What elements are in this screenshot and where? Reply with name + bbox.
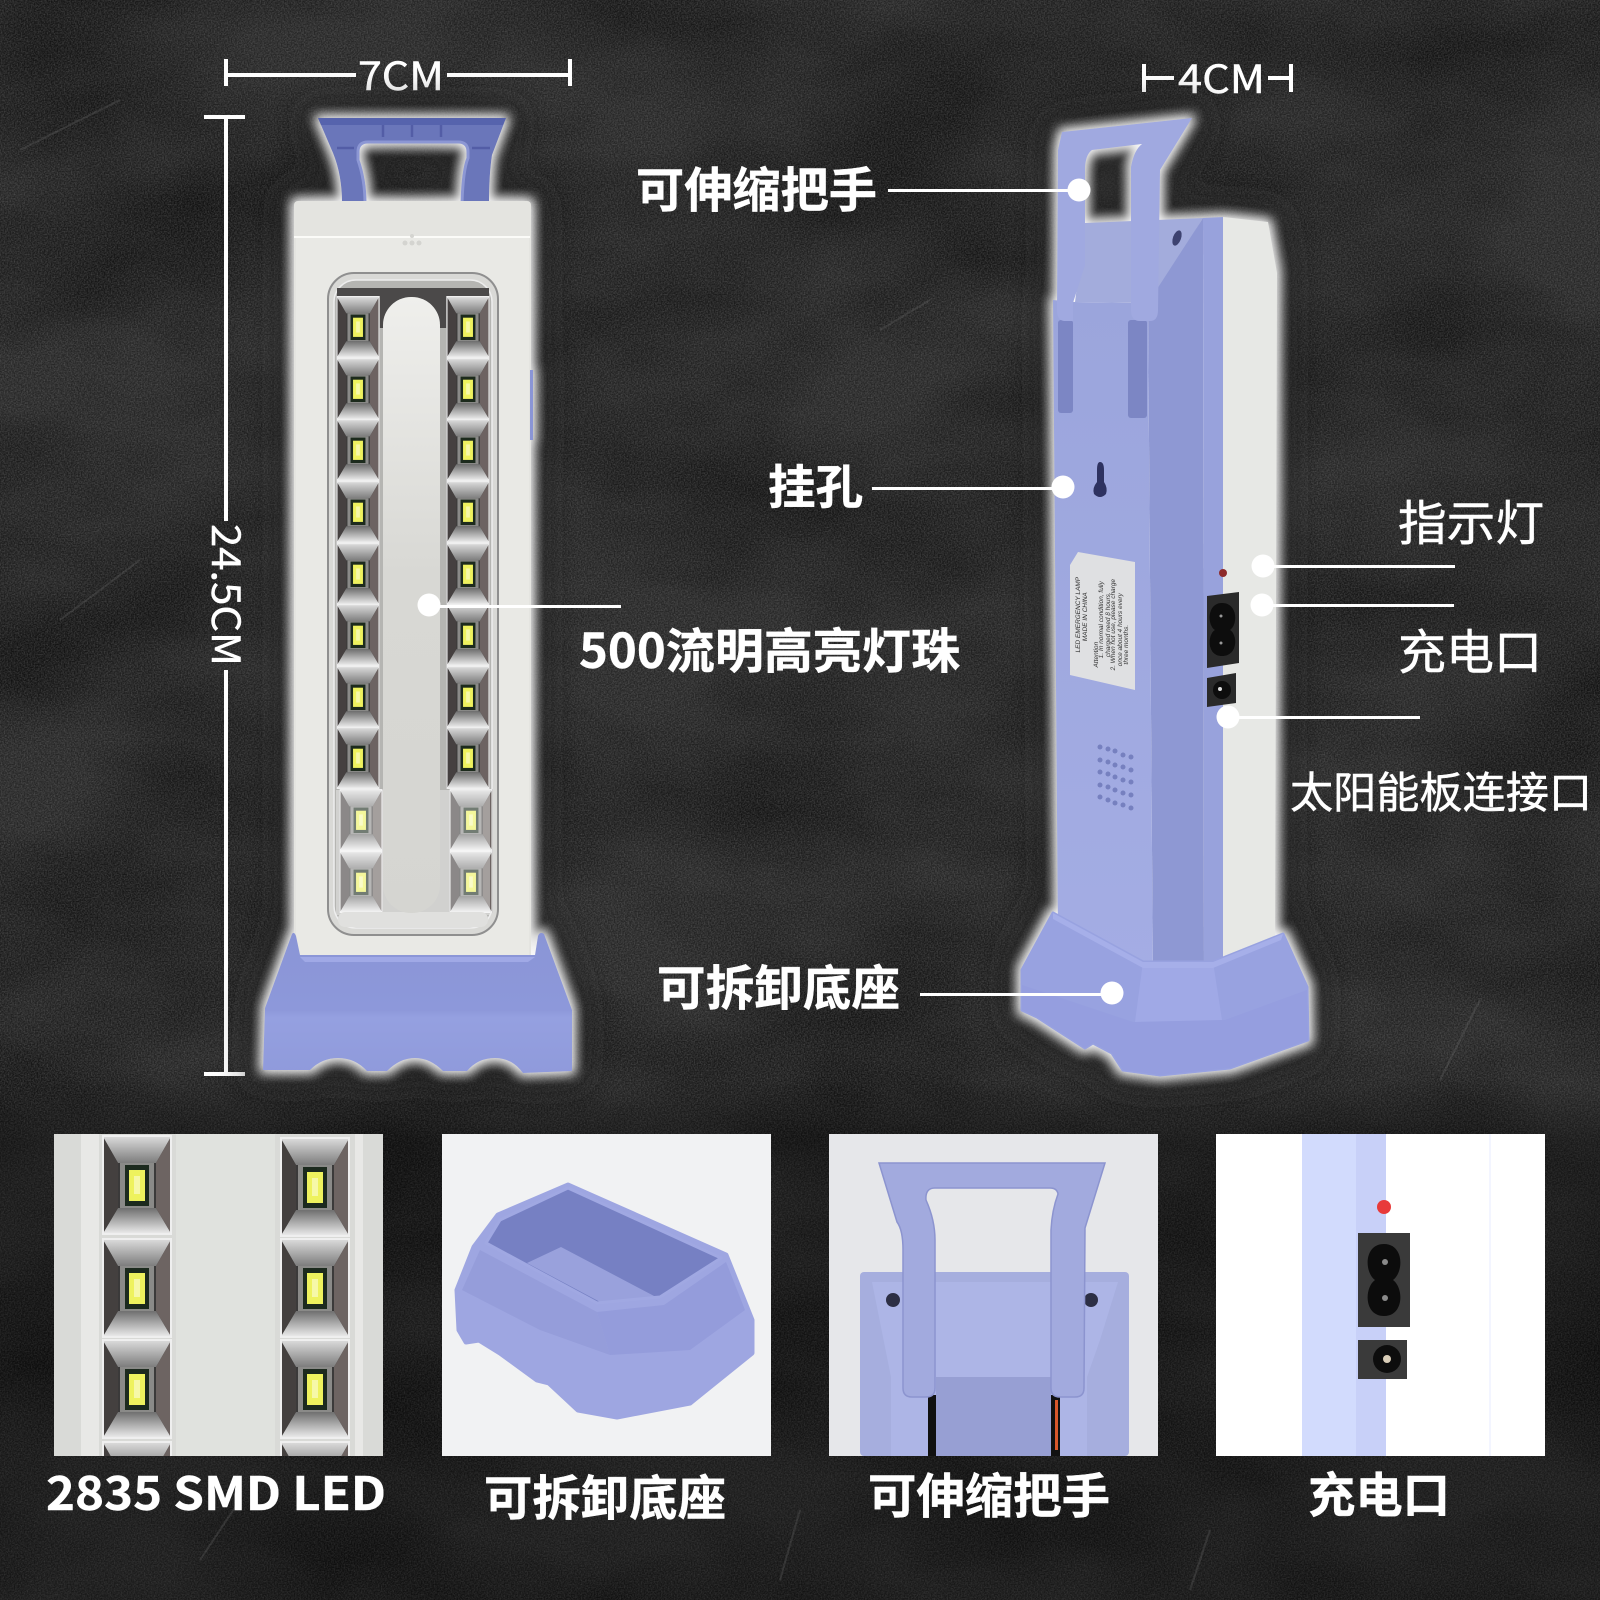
side button tab [530, 370, 533, 440]
product label: MADE IN CHINA [1082, 591, 1089, 642]
callout: retractable handle: 可伸缩把手 [636, 151, 877, 221]
callout: retractable handle [636, 151, 1090, 221]
callout: hanging hole: 挂孔 [768, 449, 863, 518]
dimension: 24.5CM height: 24.5CM [200, 524, 256, 666]
back plate [1075, 218, 1203, 303]
dimension: 7CM width: 7CM [358, 46, 444, 102]
callout: charging port [1250, 594, 1542, 683]
callout: solar panel port: 太阳能板连接口 [1290, 759, 1592, 821]
white front edge [1223, 217, 1277, 975]
product label: three months. [1123, 624, 1130, 665]
handle: side [1057, 118, 1192, 321]
caption: retractable handle: 可伸缩把手 [868, 1457, 1110, 1527]
product label: 1. In normal condition, fully [1098, 580, 1105, 659]
lamp body [294, 201, 531, 959]
solar panel port [1207, 673, 1236, 707]
panel: charging port photo [1216, 1134, 1545, 1456]
dimension: 7CM width [224, 46, 572, 102]
lamp: side view [1022, 118, 1308, 1075]
callout: detachable base [657, 949, 1124, 1019]
molded dots [402, 234, 422, 246]
hanging keyhole [1093, 462, 1107, 497]
callout: detachable base: 可拆卸底座 [657, 949, 900, 1019]
panel: 2835 SMD LED closeup [54, 1134, 383, 1541]
product label: 2. When not use, please charge [1110, 578, 1117, 671]
speaker dots [1098, 744, 1134, 810]
detachable base: side [1022, 913, 1308, 1075]
lamp: front view [263, 118, 572, 1073]
light window [328, 273, 498, 935]
panel: retractable handle photo [829, 1134, 1158, 1456]
charging socket [1207, 592, 1239, 668]
center light tube [383, 297, 440, 913]
callout: 500 lumen LEDs: 500流明高亮灯珠 [579, 612, 960, 682]
product label: once about 4 hours every [1117, 592, 1124, 667]
LED rows [336, 296, 493, 927]
callout: indicator light: 指示灯 [1398, 484, 1544, 554]
dimension: 4CM depth [1142, 49, 1293, 105]
dimension: 4CM depth: 4CM [1178, 49, 1265, 105]
callout: indicator light [1252, 484, 1544, 578]
panel: detachable base photo [442, 1134, 771, 1456]
indicator light [1219, 569, 1227, 577]
body faces [1053, 217, 1223, 985]
product label: Attention [1093, 641, 1100, 668]
callout: charging port: 充电口 [1398, 613, 1542, 683]
product label: LED EMERGENCY LAMP [1075, 576, 1082, 653]
caption: charging port: 充电口 [1308, 1456, 1450, 1526]
dimension: 24.5CM height [200, 115, 256, 1076]
handle: front [318, 118, 506, 203]
product label [1070, 552, 1135, 690]
callout: hanging hole [768, 449, 1074, 518]
callout: solar panel port [1216, 706, 1592, 821]
caption: detachable base: 可拆卸底座 [484, 1459, 726, 1529]
product label: charged need 8 hours. [1105, 592, 1112, 658]
caption: 2835 SMD LED: 2835 SMD LED [46, 1458, 386, 1524]
detachable base [263, 933, 572, 1073]
callout: 500 lumen LEDs [418, 594, 960, 682]
